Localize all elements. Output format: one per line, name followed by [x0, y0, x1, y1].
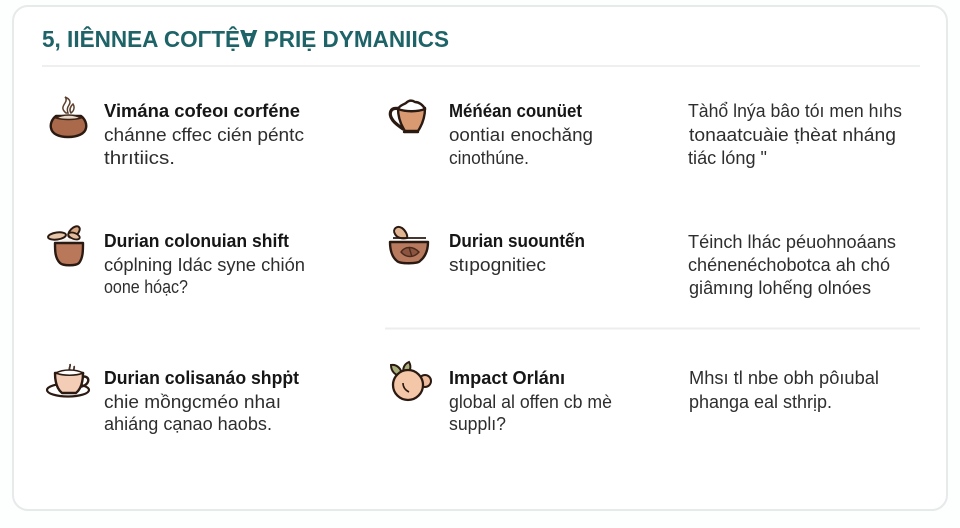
- icon: cup and saucer: [47, 364, 89, 396]
- icon: fruit face with leaves: [391, 362, 431, 400]
- text: item 5: Durian suountến: [449, 231, 585, 251]
- item: row 2 column 2: [390, 227, 585, 275]
- text: row 2 column 3: [688, 232, 896, 298]
- text: item 4: Méńéan counüet: [449, 101, 582, 121]
- text: row 1 column 3: tonaatcuàie ṭhèat nháng: [689, 125, 896, 145]
- item: row 2 column 1: [48, 224, 305, 297]
- text: row 1 column 3: Tàhổ lnýa bâo tóı men hıhs: [688, 101, 902, 121]
- text: row 1 column 3: tiác lóng ": [688, 148, 767, 168]
- title: 5, IIÊNNEA COΓΤỆⱯ PRIẸ DYMANIICS: [42, 25, 449, 52]
- text: item 2: cóplning Idác syne chión: [104, 255, 305, 275]
- item: row 1 column 1: [51, 97, 304, 168]
- text: item 2: oone hóạc?: [104, 277, 188, 297]
- text: item 2: [104, 231, 305, 297]
- text: item 6: global al offen cb mè: [449, 392, 612, 412]
- text: row 2 column 3: chénenéchobotca ah chó: [688, 255, 890, 275]
- text: item 1: thrıtiics.: [104, 148, 175, 168]
- icon: steaming bowl: [51, 97, 86, 137]
- text: item 1: [104, 101, 304, 168]
- text: item 4: oontiaı enochǎng: [449, 125, 593, 145]
- text: item 5: stıpognitiec: [449, 255, 546, 275]
- text: item 6: supplı?: [449, 414, 506, 434]
- text: item 3: [104, 368, 299, 434]
- item: row 3 column 1: [47, 364, 299, 434]
- item: row 3 column 2: [391, 362, 612, 434]
- text: item 3: ahiáng cạnao haobs.: [104, 414, 272, 434]
- text: row 2 column 3: Téinch lhác péuohnoáans: [688, 232, 896, 252]
- text: row 2 column 3: giâmıng lohếng olnóes: [689, 278, 871, 298]
- icon: sprouting cup: [48, 224, 83, 265]
- text: row 3 column 3: [689, 368, 879, 412]
- text: item 6: Impact Orlánı: [449, 368, 565, 388]
- text: row 3 column 3: phanga eal sthrịp.: [689, 392, 832, 412]
- text: row 1 column 3: [688, 101, 902, 168]
- text: item 6: [449, 368, 612, 434]
- text: item 1: Vimána cofeoı corféne: [104, 101, 300, 121]
- item: row 1 column 2: [390, 101, 593, 168]
- text: item 3: Durian colisanáo shpṗt: [104, 368, 299, 388]
- text: item 5: [449, 231, 585, 275]
- text: item 3: chie mồngcméo nhaı: [104, 392, 281, 412]
- text: item 2: Durian colonuian shift: [104, 231, 289, 251]
- icon: foam latte cup: [390, 101, 425, 132]
- text: item 1: chánne cffec cién péntc: [104, 125, 304, 145]
- text: item 4: cinothúne.: [449, 148, 529, 168]
- text: item 4: [449, 101, 593, 168]
- icon: bowl with bean: [390, 227, 428, 263]
- text: row 3 column 3: Mhsı tl nbe obh pôıubal: [689, 368, 879, 388]
